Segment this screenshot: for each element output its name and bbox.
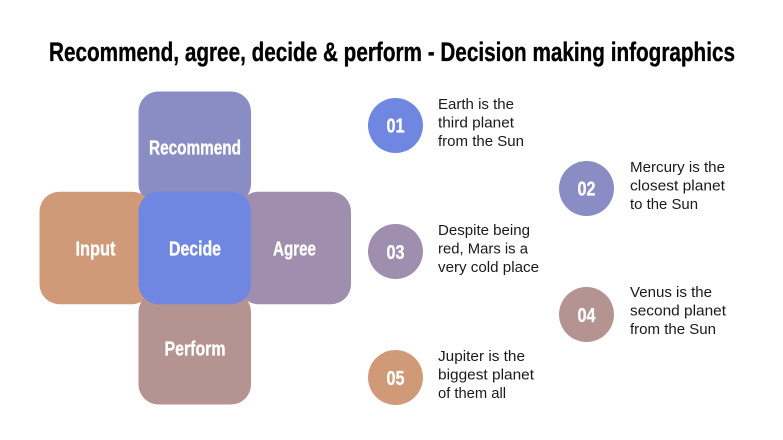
item 03	[368, 222, 539, 279]
item 03: very cold place	[438, 259, 539, 276]
item 01: Earth is the	[438, 96, 514, 113]
item 01: third planet	[438, 114, 515, 132]
item 02: 02	[578, 178, 596, 200]
item 03: 03	[386, 242, 404, 264]
item 03: red, Mars is a	[438, 240, 529, 258]
panel: agree	[238, 192, 351, 304]
panel: recommend: Recommend	[149, 138, 241, 160]
panel: agree: Agree	[273, 238, 316, 260]
panel: decide: Decide	[169, 238, 221, 260]
item 03: Despite being	[438, 222, 530, 239]
panel: input	[40, 192, 152, 304]
item 04: second planet	[630, 302, 727, 320]
item 04	[559, 284, 727, 342]
item 01: 01	[386, 116, 404, 138]
item 04: Venus is the	[630, 284, 712, 301]
item 02: to the Sun	[630, 196, 698, 213]
item 01: from the Sun	[438, 133, 524, 150]
item 05: of them all	[438, 385, 506, 402]
panel: input: Input	[76, 238, 116, 260]
item 02: closest planet	[630, 178, 726, 194]
item 05	[368, 348, 535, 405]
item 02	[559, 159, 726, 216]
cross diagram	[40, 92, 351, 404]
item 04: from the Sun	[630, 321, 716, 338]
item 02: Mercury is the	[630, 159, 725, 176]
panel: decide	[138, 192, 251, 304]
item 05: biggest planet	[438, 366, 535, 384]
item 04: 04	[578, 305, 596, 327]
item 05: 05	[386, 368, 404, 390]
panel: recommend	[138, 92, 251, 204]
panel: perform	[138, 292, 251, 404]
panel: perform: Perform	[164, 338, 226, 360]
item 05: Jupiter is the	[438, 348, 525, 365]
item 01	[368, 96, 524, 153]
